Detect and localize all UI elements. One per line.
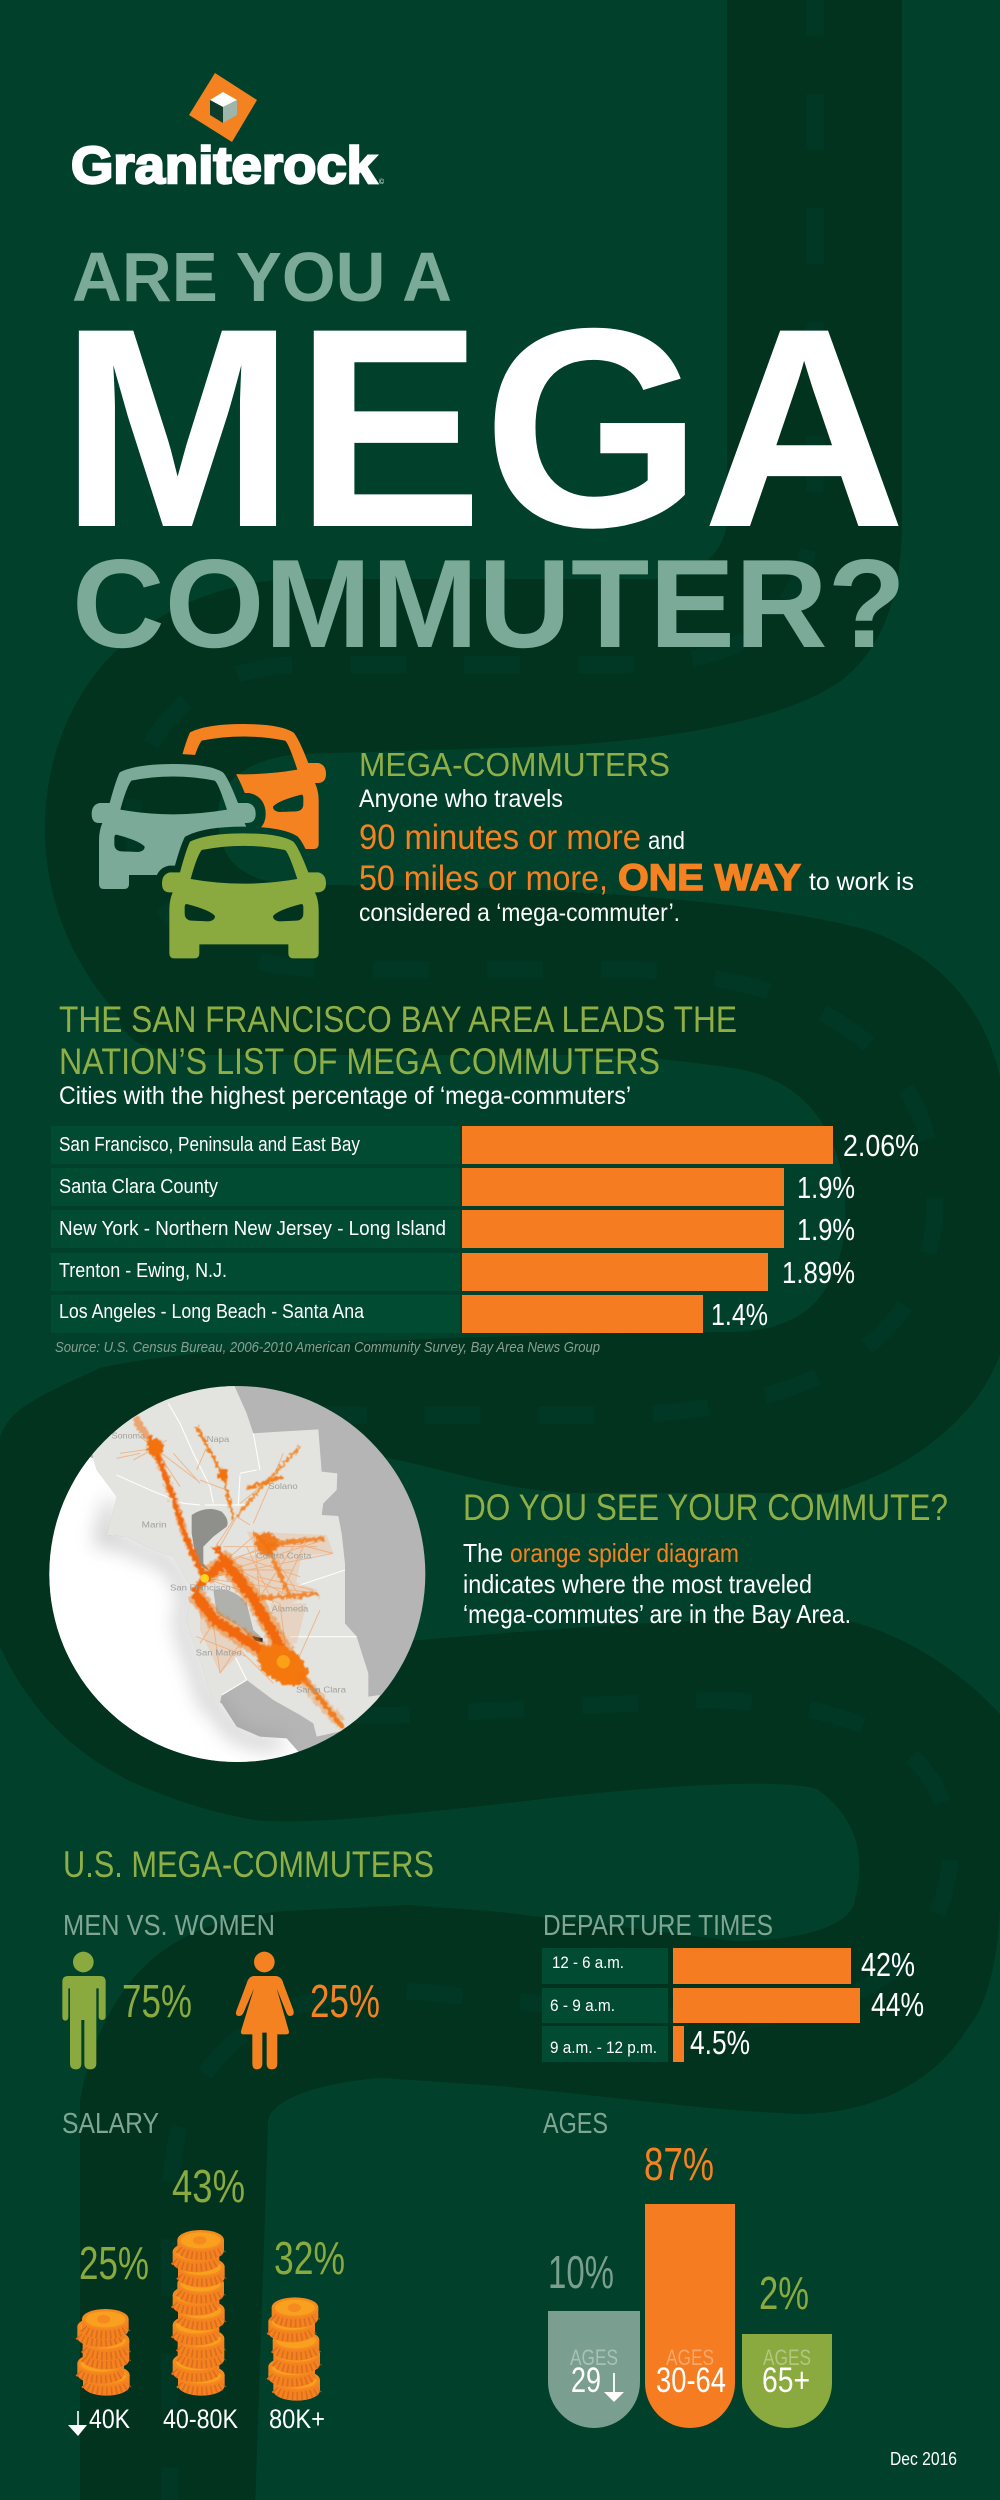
map: bay area spider diagram: [23, 1383, 440, 1790]
definition text block: [359, 746, 914, 927]
logo: Graniterock: Graniterock: [71, 137, 377, 195]
map: bay area spider diagram: San Francisco: [170, 1582, 231, 1592]
bar chart: cities: 1.4%: [711, 1297, 768, 1332]
panel: ages: AGES: [666, 2345, 714, 2370]
panel: salary: SALARY: [62, 2108, 159, 2140]
panel: salary: [62, 2108, 345, 2436]
definition text block: Anyone who travels: [359, 785, 563, 813]
map: bay area spider diagram: Santa Clara: [296, 1685, 346, 1695]
heading: San Francisco Bay Area leads: NATION’S LIST OF MEGA COMMUTERS: [59, 1041, 660, 1082]
panel: salary: 40-80K: [163, 2404, 238, 2434]
title: COMMUTER?: [72, 533, 906, 674]
map: bay area spider diagram: Alameda: [272, 1604, 309, 1614]
map: bay area spider diagram: Marin: [142, 1520, 167, 1530]
panel: departure times: DEPARTURE TIMES: [543, 1910, 773, 1942]
bar chart: cities: 1.9%: [797, 1212, 855, 1247]
panel: salary: 25%: [79, 2237, 149, 2289]
definition text block: MEGA-COMMUTERS: [359, 746, 670, 783]
bar chart: cities: Trenton - Ewing, N.J.: [59, 1260, 227, 1282]
panel: departure times: [542, 1910, 924, 2062]
bar chart: cities: [51, 1126, 919, 1333]
definition text block: to work is: [809, 868, 914, 896]
panel: ages: 29: [571, 2361, 601, 2400]
panel: ages: 30-64: [656, 2361, 726, 2400]
panel: ages: AGES: [570, 2345, 618, 2370]
map: bay area spider diagram: San Mateo: [196, 1648, 242, 1658]
heading: San Francisco Bay Area leads: [59, 999, 737, 1110]
map explanation text: The: [463, 1538, 503, 1568]
heading: U.S. Mega-Commuters: U.S. MEGA-COMMUTERS: [63, 1844, 434, 1885]
map: bay area spider diagram: Sonoma: [112, 1430, 145, 1440]
definition text block: considered a ‘mega-commuter’.: [359, 899, 680, 927]
panel: salary: 32%: [274, 2232, 345, 2284]
panel: men vs. women: [62, 1910, 380, 2069]
panel: men vs. women: 25%: [310, 1975, 380, 2027]
panel: ages: [543, 2108, 832, 2428]
map explanation text: ‘mega-commutes’ are in the Bay Area.: [463, 1599, 851, 1629]
bar chart: cities: 2.06%: [843, 1128, 919, 1163]
logo: Graniterock: ©: [379, 178, 385, 186]
panel: salary: 80K+: [269, 2404, 325, 2434]
bar chart: cities: San Francisco, Peninsula and East Bay: [59, 1134, 360, 1156]
bar chart: cities: Los Angeles - Long Beach - Santa Ana: [59, 1301, 365, 1323]
bar chart: cities: New York - Northern New Jersey - Long Island: [59, 1218, 446, 1240]
panel: departure times: 12 - 6 a.m.: [552, 1953, 624, 1972]
map explanation text: [463, 1487, 948, 1629]
panel: departure times: 4.5%: [690, 2024, 750, 2061]
panel: salary: 40K: [89, 2404, 130, 2434]
title: ARE YOU A: [72, 238, 452, 316]
heading: San Francisco Bay Area leads: Cities with the highest percentage of ‘mega-commuters’: [59, 1082, 631, 1110]
panel: ages: 10%: [548, 2246, 614, 2298]
panel: ages: 87%: [644, 2138, 714, 2190]
panel: men vs. women: 75%: [122, 1975, 192, 2027]
panel: departure times: 6 - 9 a.m.: [550, 1996, 615, 2015]
source note: Source: U.S. Census Bureau, 2006-2010 American Community Survey, Bay Area News Group: [55, 1339, 600, 1356]
map explanation text: orange spider diagram: [510, 1538, 739, 1568]
date note: Dec 2016: [890, 2449, 957, 2469]
panel: departure times: 42%: [861, 1946, 915, 1983]
logo: Graniterock: [71, 73, 385, 195]
panel: salary: 43%: [172, 2160, 245, 2212]
panel: departure times: 44%: [871, 1986, 924, 2023]
panel: departure times: 9 a.m. - 12 p.m.: [550, 2038, 657, 2057]
panel: ages: AGES: [543, 2108, 608, 2140]
definition text block: ONE WAY: [618, 857, 801, 898]
definition text block: and: [648, 827, 685, 855]
title: MEGA: [60, 270, 906, 587]
icon: three cars: [92, 724, 326, 958]
heading: San Francisco Bay Area leads: THE SAN FRANCISCO BAY AREA LEADS THE: [59, 999, 737, 1040]
map: bay area spider diagram: Napa: [207, 1434, 230, 1444]
panel: ages: 65+: [762, 2361, 810, 2400]
map: bay area spider diagram: Solano: [268, 1481, 298, 1491]
definition text block: 90 minutes or more: [359, 818, 641, 857]
bar chart: cities: Santa Clara County: [59, 1176, 218, 1198]
panel: men vs. women: MEN VS. WOMEN: [63, 1910, 275, 1942]
panel: ages: 2%: [759, 2267, 809, 2319]
bar chart: cities: 1.89%: [782, 1255, 855, 1290]
definition text block: 50 miles or more,: [359, 859, 608, 898]
bar chart: cities: 1.9%: [797, 1170, 855, 1205]
panel: ages: AGES: [763, 2345, 811, 2370]
map: bay area spider diagram: Contra Costa: [256, 1550, 312, 1560]
map explanation text: indicates where the most traveled: [463, 1569, 812, 1599]
